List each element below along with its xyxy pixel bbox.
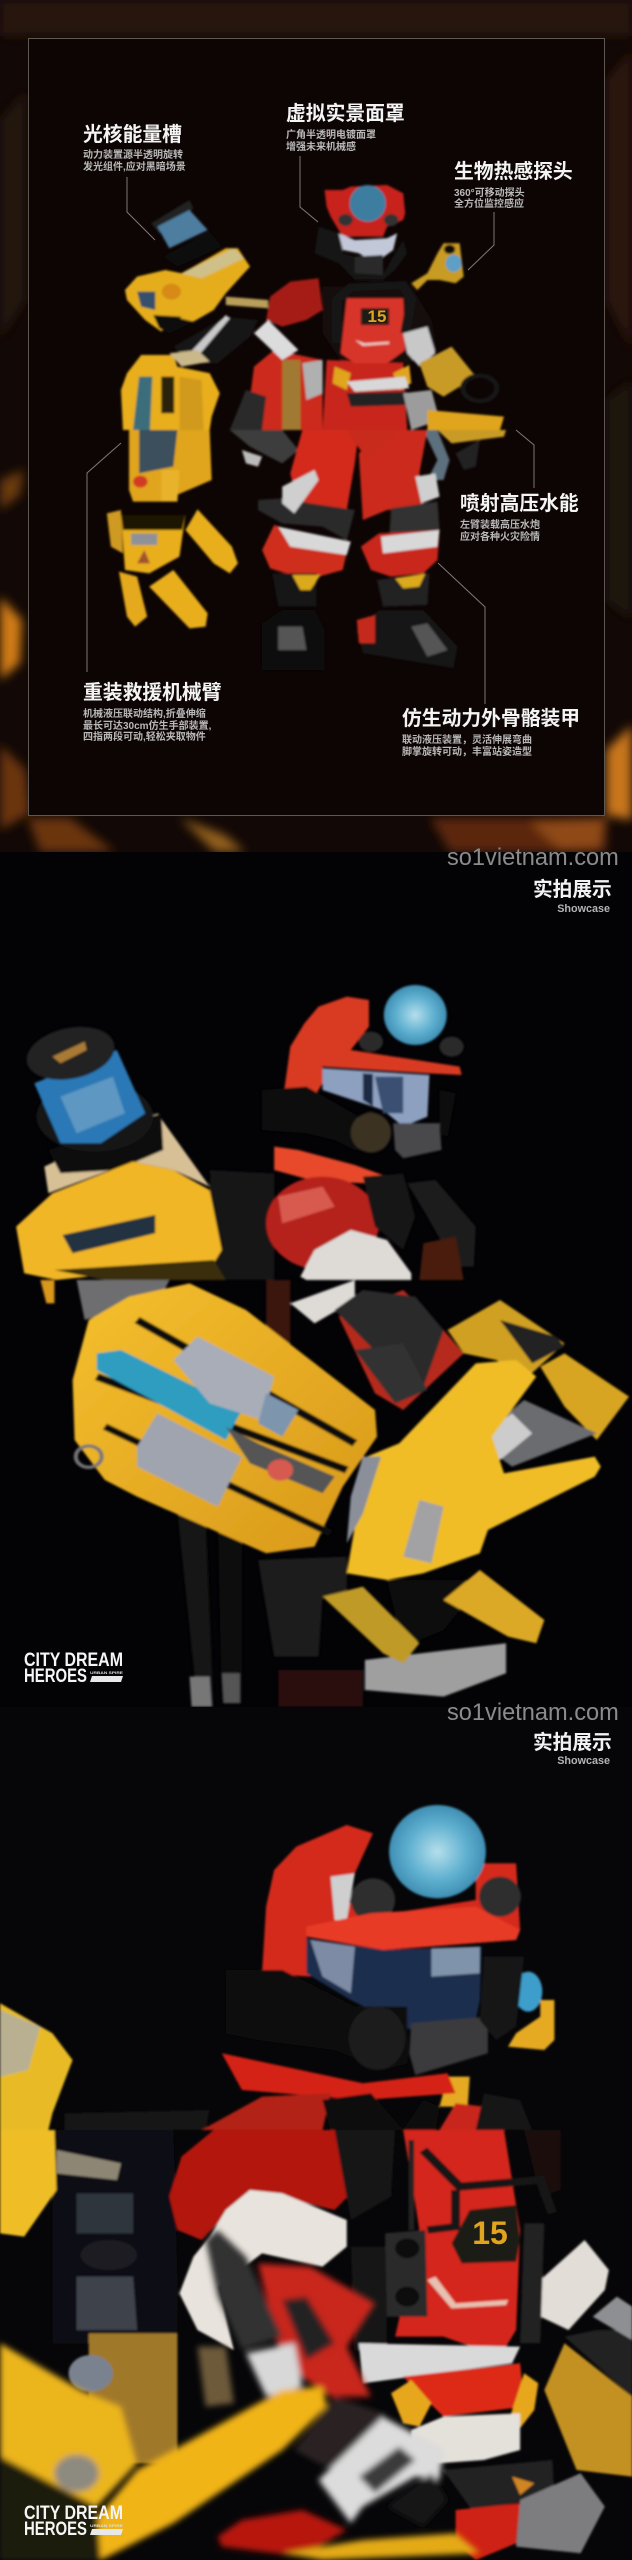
callout: exoskeleton	[402, 563, 580, 758]
illustration: firefighter robot with mechanical arm	[107, 185, 506, 670]
logo: City Dream Heroes	[24, 2503, 123, 2540]
heading: showcase	[533, 1731, 612, 1767]
photo: helmet and chest close-up	[0, 1805, 632, 2560]
harness	[337, 285, 411, 343]
callout: energy core	[83, 123, 186, 240]
photo: robot helmet and arm	[16, 985, 629, 1707]
logo: City Dream Heroes: CITY DREAM	[24, 2503, 123, 2524]
right arm	[564, 2330, 632, 2397]
logo: City Dream Heroes: URBAN SPIRE	[90, 1670, 123, 1675]
chest	[351, 2247, 387, 2350]
watermark: so1vietnam.com	[447, 845, 619, 871]
heading: showcase	[533, 878, 612, 915]
frame	[28, 38, 604, 816]
heading: showcase: Showcase	[557, 903, 610, 915]
callout: rescue arm: 最长可达30cm仿生手部装置,	[83, 719, 212, 732]
callout: rescue arm: 四指两段可动,轻松夹取物件	[83, 730, 206, 743]
helmet	[314, 227, 407, 280]
stand	[177, 1513, 214, 1707]
top of body	[77, 1280, 169, 1320]
callout: thermal probe: 全方位监控感应	[454, 197, 524, 210]
callout: water cannon: 应对各种火灾险情	[460, 530, 540, 543]
callout: visor: 增强未来机械感	[286, 140, 356, 153]
callout: exoskeleton: 仿生动力外骨骼装甲	[402, 708, 580, 730]
chest highlight	[355, 340, 389, 346]
callout: exoskeleton: 脚掌旋转可动，丰富站姿造型	[402, 745, 532, 758]
callout: energy core: 发光组件,应对黑暗场景	[83, 160, 186, 173]
logo: City Dream Heroes: HEROES	[24, 1666, 87, 1687]
panel: showcase photo 1	[0, 845, 632, 1707]
callout: visor	[286, 102, 405, 222]
callout: exoskeleton: 联动液压装置，灵活伸展弯曲	[402, 733, 532, 746]
left arm and torso	[323, 287, 437, 363]
cannon forearm	[73, 1283, 377, 1553]
watermark: so1vietnam.com	[447, 1700, 619, 1726]
mechanical forearm	[129, 430, 212, 502]
panel: feature diagram section	[0, 0, 632, 852]
callout: water cannon: 喷射高压水能	[460, 492, 579, 515]
callout: rescue arm: 机械液压联动结构,折叠伸缩	[83, 707, 206, 720]
callout: water cannon: 左臂装载高压水炮	[460, 518, 540, 531]
callout: visor: 广角半透明电镀面罩	[286, 128, 376, 141]
callout: thermal probe: 生物热感探头	[454, 161, 573, 183]
left machinery	[52, 2130, 177, 2343]
callout: visor: 虚拟实景面罩	[286, 102, 405, 125]
right hand	[347, 1360, 601, 1580]
heading: showcase: 实拍展示	[533, 1731, 612, 1754]
callout: rescue arm: 重装救援机械臂	[83, 681, 222, 704]
number badge: 15: 15	[368, 307, 386, 326]
callout: energy core: 动力装置源半透明旋转	[83, 148, 183, 161]
shoulder	[169, 2130, 355, 2240]
heading: showcase: 实拍展示	[533, 878, 612, 901]
callout: rescue arm	[83, 443, 222, 743]
callout: thermal probe	[454, 161, 573, 270]
logo: City Dream Heroes: HEROES	[24, 2519, 87, 2540]
logo: City Dream Heroes: URBAN SPIRE	[90, 2523, 123, 2528]
panel: showcase photo 2	[0, 1700, 632, 2560]
heading: showcase: Showcase	[557, 1755, 610, 1767]
logo: City Dream Heroes	[24, 1650, 123, 1687]
callout: energy core: 光核能量槽	[83, 123, 182, 146]
thighs and legs	[230, 430, 298, 463]
logo: City Dream Heroes: CITY DREAM	[24, 1650, 123, 1671]
callout: thermal probe: 360°可移动探头	[454, 186, 525, 199]
blurred foreground arm	[0, 2230, 480, 2560]
background: fire glow	[0, 0, 632, 852]
callout: water cannon	[460, 430, 579, 543]
drone probe	[411, 243, 464, 290]
number badge: 15 close-up: 15	[472, 2215, 508, 2251]
